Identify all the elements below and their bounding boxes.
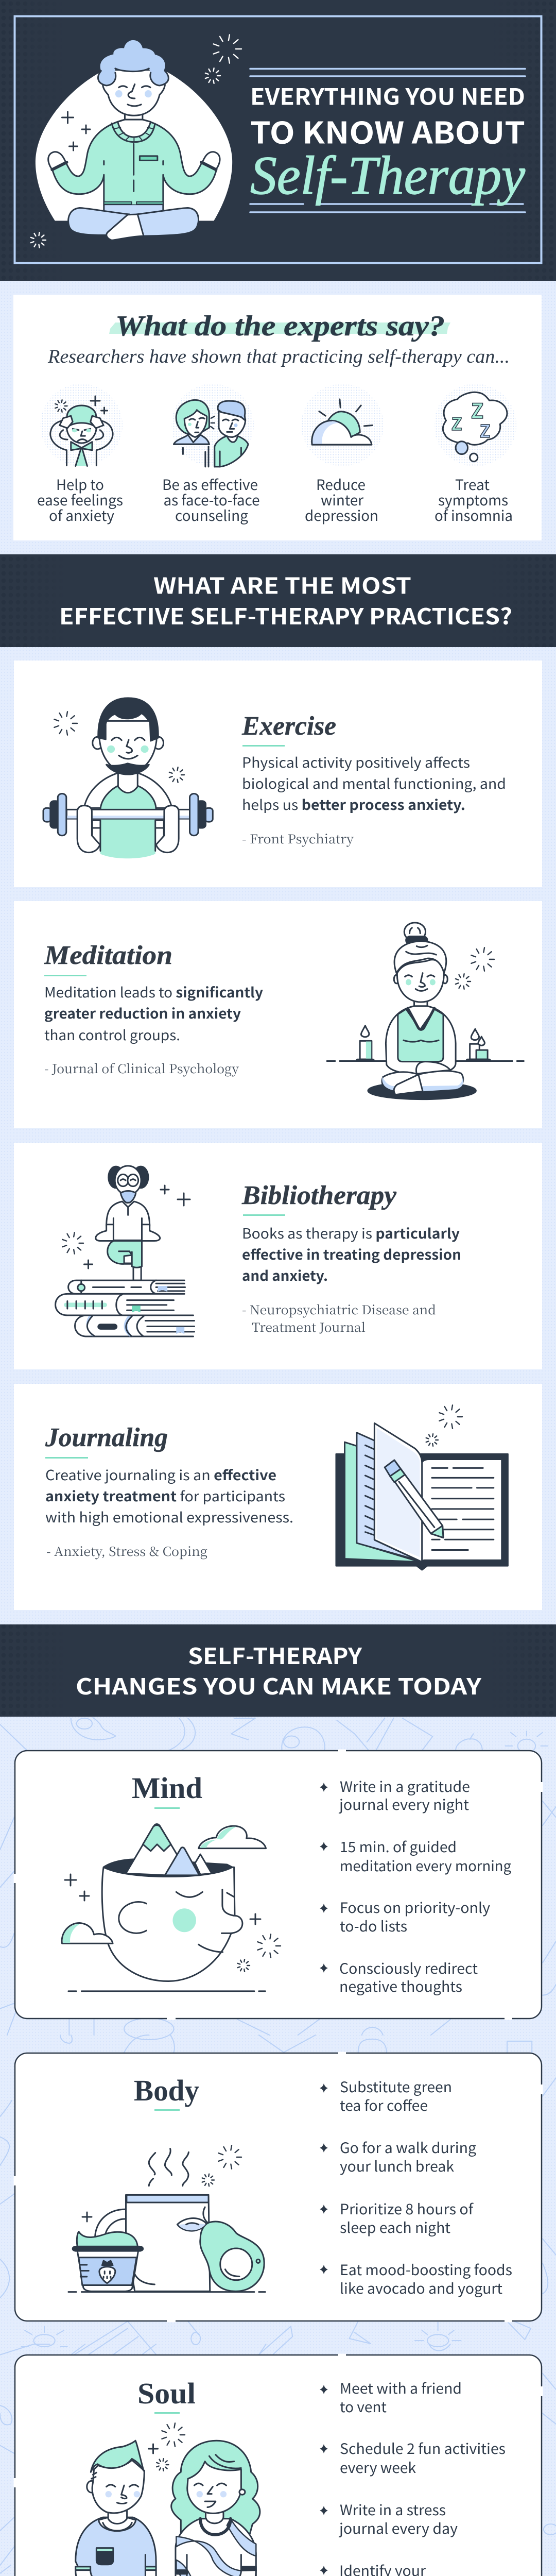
panel: meditation (14, 901, 542, 1128)
body text: anxiety treatment for participants (45, 1485, 285, 1505)
icon: sleepy thought cloud: Z (471, 395, 483, 425)
body text (45, 1464, 293, 1527)
icon: sleepy thought cloud: Z (480, 417, 490, 443)
icon: sleepy thought cloud (443, 392, 507, 462)
benefit labels: depression (305, 505, 378, 526)
heading highlight stroke (109, 323, 450, 334)
checklist: mind (320, 1776, 511, 1996)
heading: exercise: Exercise (241, 711, 336, 741)
body text: helps us better process anxiety. (242, 794, 465, 814)
body text: than control groups. (44, 1024, 180, 1044)
checklist: body: sleep each night (340, 2217, 450, 2238)
background doodle pattern (0, 1718, 556, 2576)
header band (0, 0, 556, 281)
checklist: mind: to-do lists (340, 1916, 407, 1936)
benefit labels: of anxiety (49, 505, 114, 526)
benefit labels (37, 474, 513, 526)
source: - Front Psychiatry (242, 829, 354, 847)
body text: effective in treating depression (242, 1244, 461, 1264)
heading underline (154, 2412, 180, 2414)
checklist: body: Go for a walk during (340, 2137, 476, 2158)
heading underline (45, 1457, 88, 1459)
title block: TO KNOW ABOUT (250, 109, 525, 152)
benefit labels: counseling (175, 505, 248, 526)
source: - Neuropsychiatric Disease and (242, 1300, 436, 1318)
illustration: head with mountains (62, 1824, 281, 1991)
benefit labels: symptoms (438, 489, 508, 510)
body text: Meditation leads to significantly (44, 981, 264, 1002)
body text (44, 981, 264, 1044)
benefit labels: Reduce (316, 474, 366, 495)
checklist: body: Eat mood-boosting foods (340, 2259, 512, 2280)
section band: most effective practices (0, 554, 556, 647)
checklist: body: your lunch break (340, 2156, 455, 2176)
checklist: mind: Focus on priority-only (340, 1897, 490, 1918)
checklist: mind: Write in a gratitude (340, 1776, 470, 1797)
panel: bibliotherapy (14, 1143, 542, 1369)
heading underline (154, 1807, 180, 1809)
heading underline (44, 975, 86, 976)
checklist: mind: Consciously redirect (339, 1958, 478, 1978)
icon: sun behind cloud (312, 399, 372, 445)
heading: soul: Soul (137, 2377, 196, 2410)
icon: dotted backdrops (40, 384, 516, 466)
checklist: soul: to vent (340, 2396, 387, 2417)
body text: biological and mental functioning, and (242, 773, 506, 793)
section band: most effective practices: EFFECTIVE SELF-THERAPY PRACTICES? (59, 599, 512, 631)
benefit labels: Be as effective (162, 474, 258, 495)
checklist: soul: Schedule 2 fun activities (340, 2438, 506, 2459)
source: - Journal of Clinical Psychology (44, 1059, 239, 1077)
heading: What do the experts say? (115, 310, 445, 342)
title block: Self-Therapy (250, 145, 526, 206)
title block: EVERYTHING YOU NEED (250, 78, 525, 111)
checklist: body: like avocado and yogurt (340, 2278, 502, 2298)
checklist: soul (320, 2378, 506, 2576)
benefit labels: of insomnia (435, 505, 513, 526)
heading: meditation: Meditation (44, 941, 172, 970)
heading underline (242, 745, 285, 747)
heading underline (243, 1214, 285, 1216)
checklist: body (320, 2076, 512, 2298)
checklist: mind: 15 min. of guided (340, 1836, 457, 1857)
illustration: man balancing on books (56, 1166, 194, 1336)
subheading: Researchers have shown that practicing self-therapy can... (47, 346, 510, 367)
illustration: woman meditating with candles (327, 923, 524, 1099)
body text: Physical activity positively affects (242, 752, 470, 772)
checklist: mind: journal every night (338, 1794, 469, 1815)
checklist: body: tea for coffee (340, 2095, 428, 2115)
section band: changes you can make today: CHANGES YOU CAN MAKE TODAY (76, 1669, 482, 1701)
panel: mind (15, 1751, 542, 2019)
body text (242, 1223, 461, 1285)
benefit labels: Treat (455, 474, 490, 495)
section band: most effective practices: WHAT ARE THE MOST (153, 569, 411, 601)
checklist: body: Prioritize 8 hours of (340, 2198, 474, 2219)
body text: Books as therapy is particularly (242, 1223, 460, 1243)
illustration: open journal and pencil (336, 1405, 508, 1570)
checklist: body: Substitute green (340, 2076, 452, 2097)
heading: body: Body (134, 2074, 199, 2107)
body text: greater reduction in anxiety (44, 1003, 241, 1023)
checklist: soul: Write in a stress (340, 2499, 446, 2520)
body text: and anxiety. (242, 1265, 328, 1285)
illustration: mug, yogurt and avocado (68, 2145, 265, 2292)
checklist: mind: meditation every morning (340, 1855, 511, 1876)
panel: soul (15, 2355, 542, 2576)
benefit labels: as face-to-face (164, 489, 259, 510)
heading underline (154, 2109, 180, 2111)
heading: bibliotherapy: Bibliotherapy (241, 1181, 397, 1210)
source: Treatment Journal (252, 1317, 366, 1335)
panel: exercise (14, 660, 542, 887)
body text (242, 752, 506, 814)
heading: mind: Mind (132, 1771, 202, 1805)
source: - Anxiety, Stress & Coping (46, 1541, 207, 1560)
icon: sleepy thought cloud: Z (451, 410, 462, 435)
body text: Creative journaling is an effective (45, 1464, 276, 1484)
panel: body (15, 2053, 542, 2321)
source (242, 1300, 436, 1335)
section band: changes you can make today (0, 1624, 556, 1717)
benefit labels: ease feelings (37, 489, 123, 510)
panel: what do the experts say (13, 295, 542, 540)
title block (250, 69, 526, 212)
heading: journaling: Journaling (45, 1423, 168, 1452)
illustration: man lifting barbell (43, 698, 213, 858)
checklist: mind: negative thoughts (339, 1976, 462, 1996)
checklist: soul: every week (340, 2457, 416, 2478)
hero illustration: meditating man (31, 35, 241, 248)
checklist: soul: journal every day (338, 2518, 458, 2538)
icon: anxious person (50, 396, 113, 466)
section band: changes you can make today: SELF-THERAPY (188, 1639, 362, 1671)
benefit labels: Help to (56, 474, 104, 495)
checklist: soul: Meet with a friend (340, 2378, 462, 2398)
benefit labels: winter (321, 489, 363, 510)
body text: with high emotional expressiveness. (45, 1506, 293, 1527)
icon: two people talking (174, 400, 248, 467)
illustration: two friends (68, 2423, 265, 2576)
panel: journaling (14, 1384, 542, 1610)
